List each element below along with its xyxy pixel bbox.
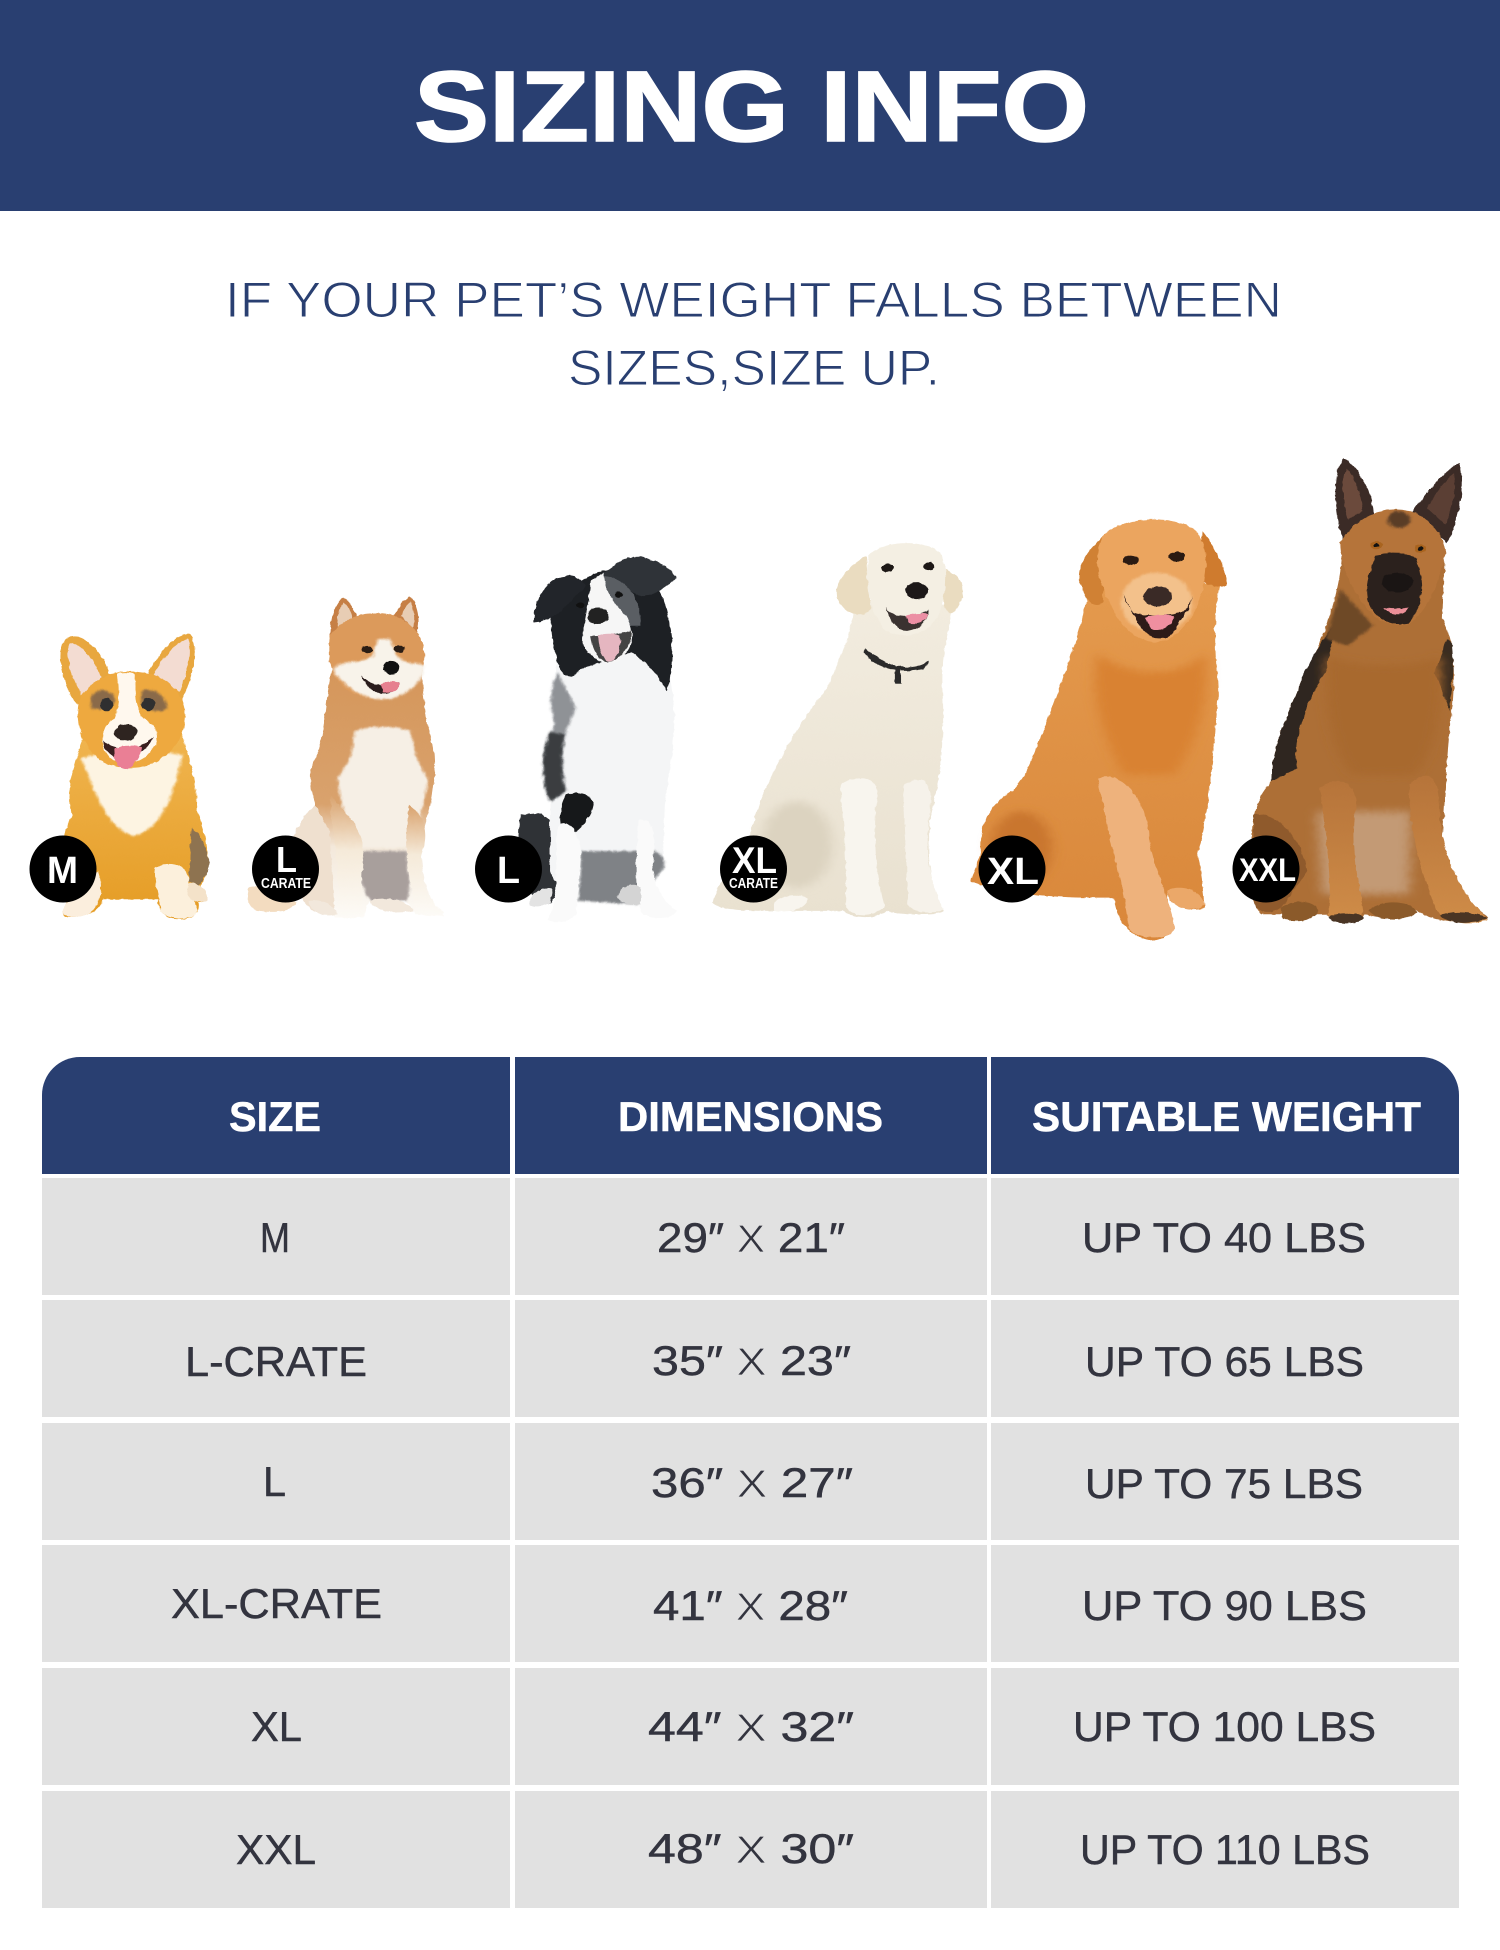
badge: L carate: L xyxy=(276,839,297,880)
row: XL: UP TO 100 LBS xyxy=(1073,1703,1376,1750)
subtitle: SIZES,SIZE UP. xyxy=(568,340,940,396)
row: L-crate: UP TO 65 LBS xyxy=(1085,1338,1364,1385)
dog: corgi, size M xyxy=(30,634,208,919)
row: L: 36″ X 27″ xyxy=(651,1459,853,1506)
row: XL-crate: XL-CRATE xyxy=(171,1580,382,1627)
badge: L carate: CARATE xyxy=(261,876,311,892)
row: M: UP TO 40 LBS xyxy=(1082,1214,1366,1261)
badge: XL carate: CARATE xyxy=(729,876,778,892)
row: XXL: XXL xyxy=(236,1826,316,1873)
badge: XXL: XXL xyxy=(1239,852,1296,888)
badge: XL carate: XL xyxy=(732,840,777,881)
badge: XL xyxy=(978,836,1046,902)
subtitle: IF YOUR PET’S WEIGHT FALLS BETWEEN xyxy=(225,272,1282,328)
table header row: SUITABLE WEIGHT xyxy=(1032,1093,1421,1140)
row: XL-crate xyxy=(42,1545,1459,1662)
badge: M: M xyxy=(47,850,78,892)
row: L-crate: 35″ X 23″ xyxy=(652,1337,851,1384)
row: XL-crate: 41″ X 28″ xyxy=(653,1582,848,1629)
badge: L: L xyxy=(497,850,520,892)
row: XXL xyxy=(42,1791,1459,1908)
row: XXL: 48″ X 30″ xyxy=(648,1825,854,1872)
row: XL: XL xyxy=(251,1703,302,1750)
badge: L carate xyxy=(252,836,319,902)
badge: L xyxy=(475,836,542,902)
row: L: UP TO 75 LBS xyxy=(1085,1460,1363,1507)
row: L-crate xyxy=(42,1300,1459,1417)
badge: XL carate xyxy=(720,836,787,902)
dog: golden retriever, size XL xyxy=(970,519,1227,940)
row: XL xyxy=(42,1668,1459,1785)
dog: shiba, size L crate xyxy=(247,596,445,919)
sizing table xyxy=(42,1057,1459,1908)
title banner xyxy=(0,0,1500,211)
dog: white retriever, size XL crate xyxy=(713,543,963,917)
table header row: SIZE xyxy=(229,1093,321,1140)
row: XL-crate: UP TO 90 LBS xyxy=(1082,1582,1367,1629)
row: M xyxy=(42,1178,1459,1295)
table header row: DIMENSIONS xyxy=(618,1093,883,1140)
title: sizing info: SIZING INFO xyxy=(414,51,1089,163)
row: M: M xyxy=(260,1214,290,1261)
row: L-crate: L-CRATE xyxy=(185,1338,367,1385)
row: L: L xyxy=(263,1458,286,1505)
table header row xyxy=(42,1057,1459,1174)
row: XL: 44″ X 32″ xyxy=(648,1703,854,1750)
badge: M xyxy=(30,836,96,902)
row: XXL: UP TO 110 LBS xyxy=(1080,1826,1370,1873)
row: L xyxy=(42,1423,1459,1540)
subtitle xyxy=(225,272,1282,396)
badge: XXL xyxy=(1232,836,1300,902)
dog: german shepherd, size XXL xyxy=(1232,458,1488,923)
badge: XL: XL xyxy=(987,851,1039,893)
row: M: 29″ X 21″ xyxy=(657,1214,845,1261)
dog size lineup xyxy=(30,458,1488,940)
dog: border collie, size L xyxy=(475,557,677,922)
